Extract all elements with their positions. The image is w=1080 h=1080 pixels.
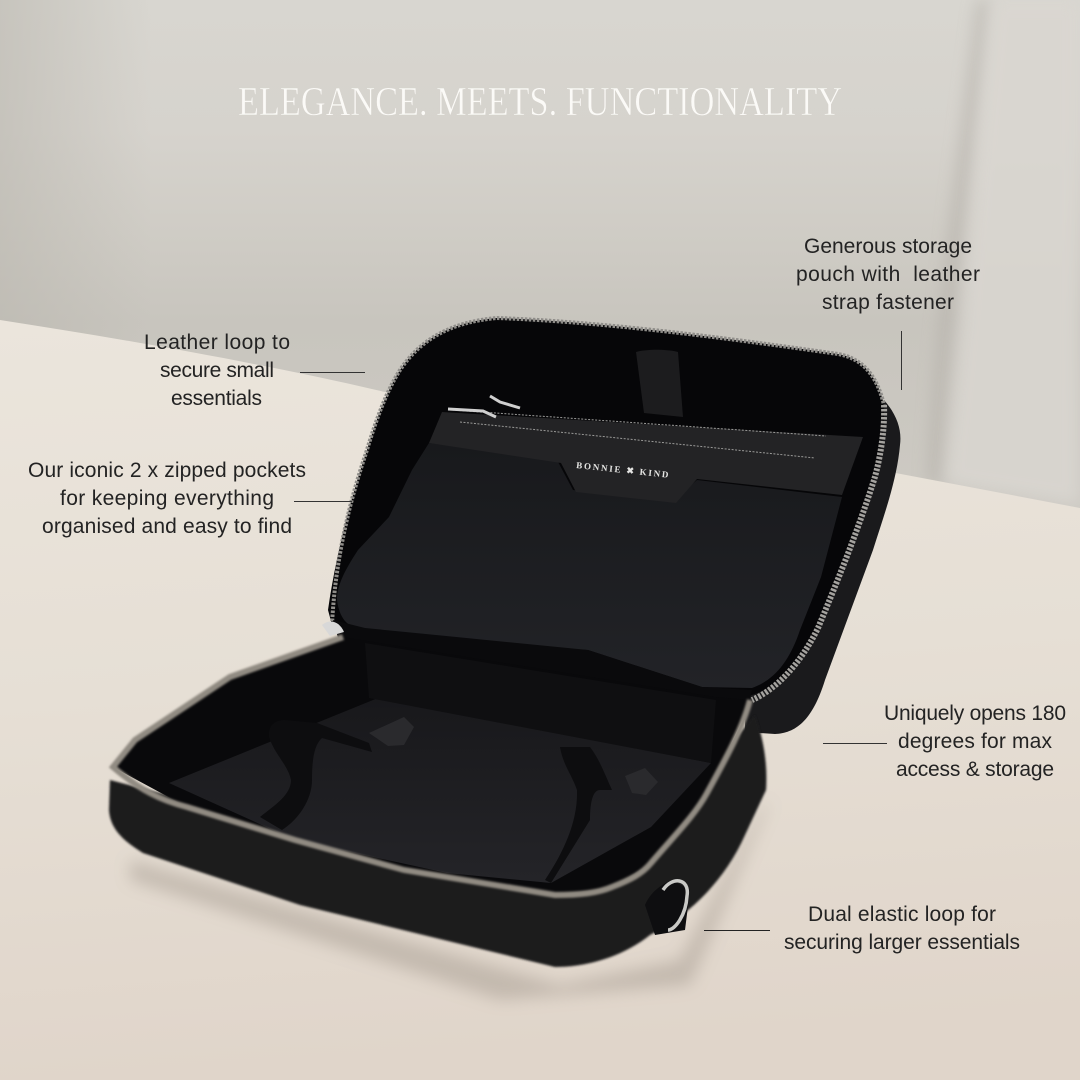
left elastic loop bbox=[260, 720, 372, 830]
callout: storage pouch: pouch with leather bbox=[796, 263, 980, 286]
title: ELEGANCE. MEETS. FUNCTIONALITY bbox=[238, 78, 842, 124]
upper lid interior bbox=[328, 318, 884, 697]
right elastic loop bbox=[545, 747, 612, 883]
callout: storage pouch bbox=[796, 235, 980, 390]
callout: opens 180 degrees bbox=[823, 702, 1066, 781]
lower tray interior bbox=[113, 637, 752, 895]
leather zipped pockets strip bbox=[429, 412, 863, 503]
leather strap fastener bbox=[636, 350, 683, 417]
callout: opens 180 degrees: Uniquely opens 180 bbox=[884, 702, 1066, 725]
tray floor bbox=[169, 698, 711, 883]
callout: storage pouch: strap fastener bbox=[822, 291, 954, 314]
lower tray outer shell bbox=[109, 715, 766, 967]
callout: zipped pockets: Our iconic 2 x zipped pockets bbox=[28, 459, 306, 482]
silver zip pulls bbox=[448, 396, 520, 417]
callout: zipped pockets bbox=[28, 459, 352, 538]
D-ring hardware bbox=[645, 880, 690, 935]
callout: zipped pockets: organised and easy to find bbox=[42, 515, 292, 538]
brand logo: BONNIE ✖ KIND bbox=[576, 460, 671, 480]
background: table surface bbox=[0, 320, 1080, 1080]
callout: opens 180 degrees: access & storage bbox=[896, 758, 1054, 781]
callout: leather loop: secure small bbox=[160, 359, 274, 382]
callout: zipped pockets: for keeping everything bbox=[60, 487, 274, 510]
right elastic tab bbox=[625, 768, 658, 795]
callout: leather loop bbox=[144, 331, 365, 410]
hinge gusset joining lid and tray bbox=[333, 620, 752, 720]
product: open toiletry bag bbox=[109, 318, 900, 967]
callout: dual elastic loop bbox=[704, 903, 1020, 954]
callout: storage pouch: Generous storage bbox=[804, 235, 972, 258]
pocket zips bbox=[452, 410, 826, 458]
silver zip slider bbox=[322, 621, 344, 636]
upper lid zipper bbox=[332, 318, 884, 625]
left elastic tab bbox=[369, 717, 414, 746]
upper lid right zipper bbox=[752, 405, 884, 700]
callout: dual elastic loop: securing larger essentials bbox=[784, 931, 1020, 954]
bag shadow bbox=[130, 800, 770, 1000]
callout: dual elastic loop: Dual elastic loop for bbox=[808, 903, 996, 926]
tray zipper bbox=[113, 637, 750, 895]
back gusset flap bbox=[365, 643, 716, 763]
background: sofa bbox=[0, 0, 1080, 520]
upper lid outer shell bbox=[745, 400, 900, 734]
callout: opens 180 degrees: degrees for max bbox=[898, 730, 1052, 753]
fabric pocket panel bbox=[337, 443, 842, 688]
callout: leather loop: Leather loop to bbox=[144, 331, 290, 354]
callout: leather loop: essentials bbox=[171, 387, 262, 410]
